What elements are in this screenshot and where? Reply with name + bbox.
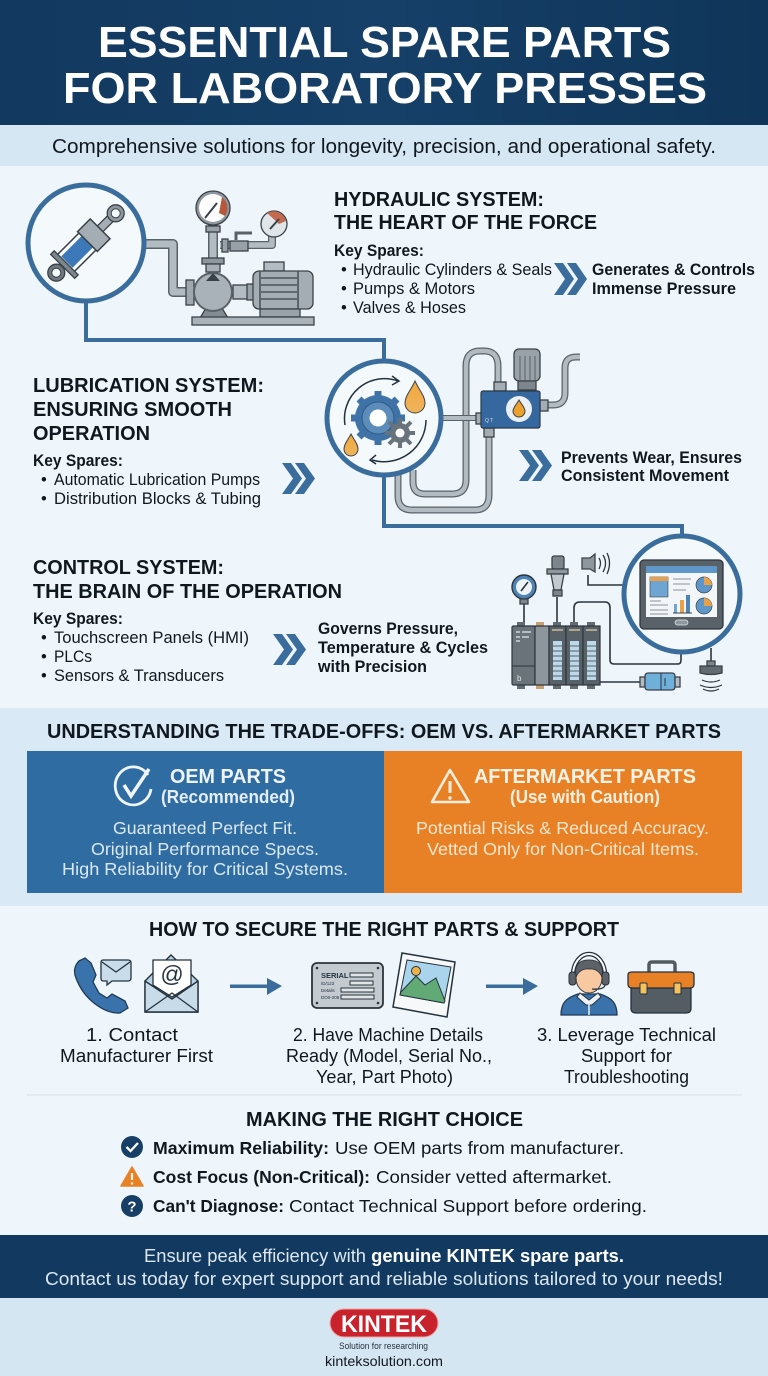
step 3: technical support — [537, 954, 716, 1087]
icon: serial plate and photo: DO0-205 — [321, 995, 340, 1000]
list: control key spares: PLCs — [54, 648, 92, 666]
panel: making the right choice — [121, 1108, 647, 1217]
list: hydraulic key spares: • — [341, 261, 347, 279]
outcome: control — [317, 620, 488, 676]
list: hydraulic key spares: Hydraulic Cylinders & Seals — [353, 261, 552, 279]
item: maximum reliability: Use OEM parts from manufacturer. — [335, 1138, 624, 1158]
outcome: hydraulic — [592, 261, 755, 298]
step 2: machine details — [286, 953, 492, 1087]
icon: hydraulic cylinder circle — [28, 185, 144, 301]
arrow — [486, 978, 538, 995]
outcome: hydraulic: Immense Pressure — [592, 280, 736, 298]
icon: HMI touchscreen circle — [624, 536, 740, 652]
panel: OEM vs aftermarket trade-offs — [0, 708, 768, 906]
item: maximum reliability: Maximum Reliability: — [153, 1138, 329, 1158]
heading: control: THE BRAIN OF THE OPERATION — [33, 580, 342, 603]
item: cost focus — [121, 1167, 612, 1187]
icon: phone, message and email: @ — [160, 961, 184, 987]
icon: lubrication pump and tubing: Q T — [485, 418, 493, 424]
label: step 2: Year, Part Photo) — [316, 1067, 453, 1087]
list: control key spares: • — [41, 629, 47, 647]
item: cost focus: Consider vetted aftermarket. — [376, 1167, 612, 1187]
title — [63, 18, 707, 113]
footer call to action — [0, 1235, 768, 1298]
heading: lubrication — [33, 374, 264, 445]
proximity sensor — [707, 661, 715, 666]
outcome: control: Temperature & Cycles — [318, 639, 488, 657]
card: OEM parts — [27, 751, 384, 893]
list: lubrication key spares: • — [41, 471, 47, 489]
list: hydraulic key spares: Valves & Hoses — [353, 299, 466, 317]
card: OEM parts: OEM PARTS — [170, 766, 286, 788]
icon: warning triangle — [432, 770, 469, 802]
arrow — [230, 978, 282, 995]
list: lubrication key spares: Distribution Blocks & Tubing — [54, 490, 261, 508]
speaker — [582, 554, 595, 572]
label: step 3: Troubleshooting — [564, 1067, 689, 1087]
list: lubrication key spares: Key Spares: — [33, 452, 123, 470]
card: OEM parts: Guaranteed Perfect Fit. — [113, 818, 297, 838]
brand footer: Solution for researching — [339, 1341, 428, 1352]
heading: hydraulic: THE HEART OF THE FORCE — [334, 211, 597, 234]
label: step 3: 3. Leverage Technical — [537, 1025, 716, 1045]
list: control key spares: Key Spares: — [33, 610, 123, 628]
icon: serial plate and photo: SERIAL — [321, 971, 349, 980]
icon: serial plate and photo: ID/123 — [321, 981, 335, 986]
subtitle band — [0, 125, 768, 166]
item: maximum reliability — [121, 1136, 624, 1158]
outcome: hydraulic: Generates & Controls — [592, 261, 755, 279]
list: control key spares: • — [41, 648, 47, 666]
heading: control: CONTROL SYSTEM: — [33, 556, 224, 579]
label: step 2 — [286, 1025, 492, 1087]
title: FOR LABORATORY PRESSES — [63, 64, 707, 113]
card: aftermarket parts: Vetted Only for Non-Critical Items. — [427, 839, 699, 859]
heading: lubrication: LUBRICATION SYSTEM: — [33, 374, 264, 397]
brand footer: kinteksolution.com — [325, 1353, 443, 1369]
list: hydraulic key spares: • — [341, 280, 347, 298]
item: can't diagnose: ? — [127, 1198, 137, 1216]
icon: chevrons — [519, 450, 552, 481]
card: OEM parts: High Reliability for Critical Systems. — [62, 859, 348, 879]
item: can't diagnose — [121, 1195, 647, 1217]
label: step 2: 2. Have Machine Details — [293, 1025, 483, 1045]
outcome: lubrication — [561, 449, 742, 485]
label: step 3: Support for — [581, 1046, 672, 1066]
outcome: control: with Precision — [317, 658, 427, 676]
label: step 1: Manufacturer First — [60, 1046, 213, 1066]
list: lubrication key spares: Automatic Lubrication Pumps — [54, 471, 260, 489]
PLC rack — [517, 622, 525, 627]
subtitle band: Comprehensive solutions for longevity, precision, and operational safety. — [52, 136, 716, 158]
footer call to action: Contact us today for expert support and reliable solutions tailored to your needs! — [45, 1269, 723, 1289]
heading: lubrication: OPERATION — [33, 422, 150, 445]
panel: hydraulic system — [28, 185, 755, 325]
icon: phone, message and email — [75, 955, 198, 1013]
list: hydraulic key spares: • — [341, 299, 347, 317]
icon: chevrons — [554, 263, 587, 295]
heading: lubrication: ENSURING SMOOTH — [33, 398, 232, 421]
outcome: lubrication: Consistent Movement — [561, 467, 729, 485]
brand footer — [0, 1298, 768, 1376]
icon: check circle — [115, 767, 151, 805]
list: hydraulic key spares — [334, 242, 552, 317]
icon: PLC and sensors — [512, 553, 722, 691]
panel: control system — [33, 536, 740, 691]
item: can't diagnose: Contact Technical Support before ordering. — [289, 1196, 647, 1216]
panel: lubrication system — [33, 349, 742, 510]
icon: serial plate and photo: Details — [321, 988, 336, 993]
icon: support agent and toolbox — [561, 954, 694, 1015]
item: can't diagnose: Can't Diagnose: — [153, 1196, 284, 1216]
heading: hydraulic: HYDRAULIC SYSTEM: — [334, 188, 544, 211]
heading: right choice: MAKING THE RIGHT CHOICE — [246, 1108, 523, 1131]
icon: PLC and sensors: b — [517, 674, 522, 683]
icon: pump and gauges — [146, 191, 314, 325]
list: hydraulic key spares: Key Spares: — [334, 242, 424, 260]
card: OEM parts: (Recommended) — [161, 787, 295, 807]
card: aftermarket parts: AFTERMARKET PARTS — [474, 766, 696, 788]
icon: lubrication pump and tubing — [398, 349, 580, 510]
card: aftermarket parts: (Use with Caution) — [510, 787, 660, 807]
logo: KINTEK: KINTEK — [341, 1311, 428, 1338]
connector line between system circles — [86, 300, 682, 540]
step 1: contact manufacturer — [60, 955, 213, 1066]
outcome: lubrication: Prevents Wear, Ensures — [561, 449, 742, 467]
header banner — [0, 0, 768, 125]
heading: trade-offs: UNDERSTANDING THE TRADE-OFFS: OEM VS. AFTERMARKET PARTS — [47, 720, 721, 743]
item: cost focus: Cost Focus (Non-Critical): — [153, 1167, 370, 1187]
footer call to action: Ensure peak efficiency with genuine KINTEK spare parts. — [144, 1246, 624, 1266]
card: OEM parts: Original Performance Specs. — [91, 839, 319, 859]
label: step 1 — [60, 1025, 213, 1066]
label: step 3 — [537, 1025, 716, 1087]
outcome: control: Governs Pressure, — [318, 620, 458, 638]
list: lubrication key spares: • — [41, 490, 47, 508]
card: aftermarket parts: Potential Risks & Reduced Accuracy. — [416, 818, 709, 838]
list: lubrication key spares — [33, 452, 261, 508]
heading: control — [33, 556, 342, 603]
heading: hydraulic — [334, 188, 597, 234]
card: aftermarket parts — [384, 751, 742, 893]
heading: how to secure parts: HOW TO SECURE THE RIGHT PARTS & SUPPORT — [149, 918, 619, 941]
icon: gears circle — [327, 361, 441, 475]
icon: chevrons — [282, 463, 315, 494]
list: control key spares: Sensors & Transducers — [54, 667, 224, 685]
list: control key spares: • — [41, 667, 47, 685]
list: control key spares — [33, 610, 249, 685]
icon: chevrons — [273, 634, 306, 665]
icon: serial plate and photo — [312, 953, 455, 1017]
list: hydraulic key spares: Pumps & Motors — [353, 280, 475, 298]
label: step 1: 1. Contact — [86, 1025, 178, 1045]
list: control key spares: Touchscreen Panels (HMI) — [54, 629, 249, 647]
label: step 2: Ready (Model, Serial No., — [286, 1046, 492, 1066]
title: ESSENTIAL SPARE PARTS — [98, 18, 671, 67]
pressure sensor — [552, 556, 564, 569]
inline sensor — [640, 677, 645, 687]
gauge — [512, 575, 536, 599]
